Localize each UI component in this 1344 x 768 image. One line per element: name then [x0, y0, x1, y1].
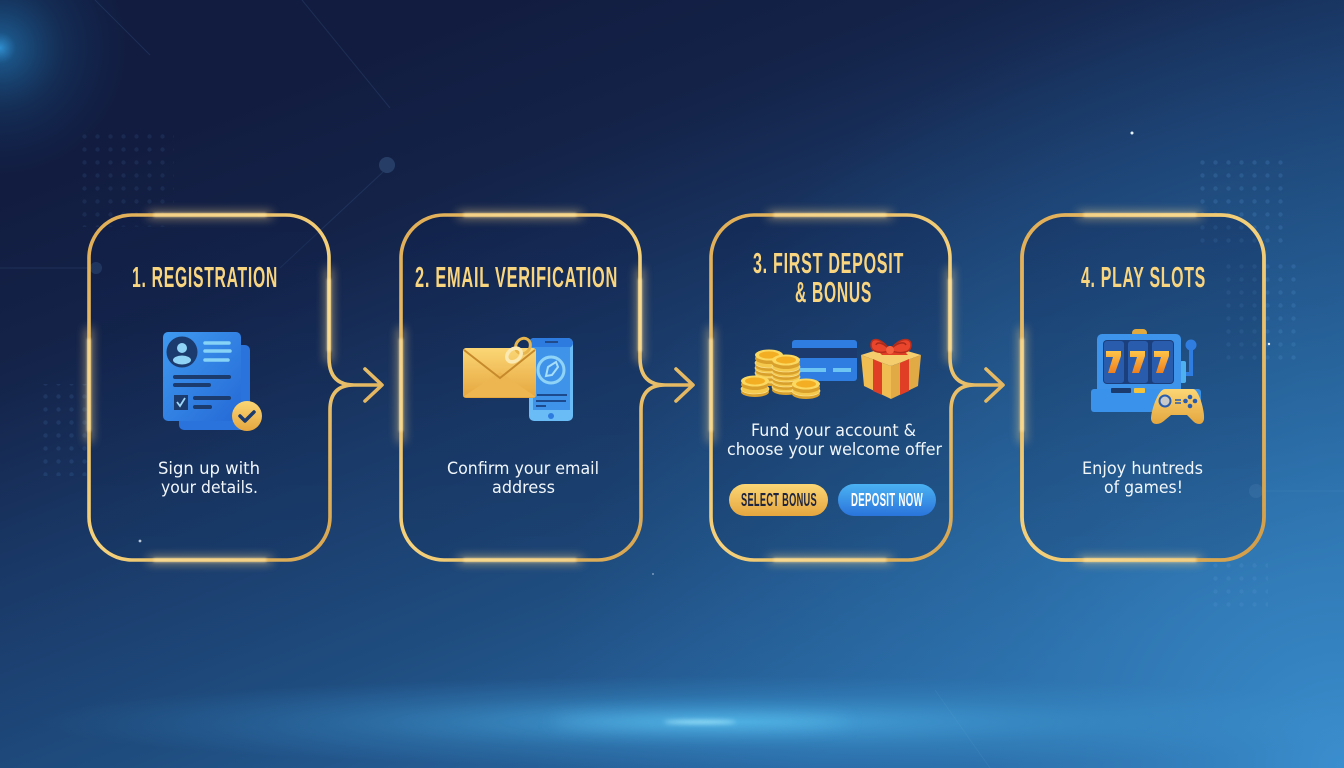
description: Confirm your email — [447, 459, 599, 478]
description — [727, 421, 942, 459]
description: of games! — [1104, 478, 1183, 497]
panel: step 2 email verification — [401, 215, 693, 560]
button: select bonus: SELECT BONUS — [741, 490, 817, 510]
button: deposit now — [838, 484, 936, 516]
icon: slot machine and gamepad — [1091, 329, 1204, 424]
heading: 2. EMAIL VERIFICATION — [415, 262, 618, 294]
description: address — [492, 478, 555, 497]
description — [158, 459, 260, 497]
heading — [753, 248, 904, 309]
description — [447, 459, 599, 497]
icon: coin stacks — [741, 350, 820, 399]
panel: step 1 registration — [89, 215, 382, 560]
heading: & BONUS — [795, 277, 872, 309]
heading: 1. REGISTRATION — [132, 262, 278, 294]
icon: envelope and phone — [463, 335, 573, 421]
button: select bonus — [729, 484, 828, 516]
description: Sign up with — [158, 459, 260, 478]
description: choose your welcome offer — [727, 440, 942, 459]
icon: gift box — [861, 340, 921, 399]
icon: registration form — [163, 332, 262, 431]
background sparkles — [139, 132, 1270, 575]
card outline with arrow — [711, 215, 1003, 560]
description: Enjoy huntreds — [1082, 459, 1203, 478]
heading: 3. FIRST DEPOSIT — [753, 248, 904, 280]
panel: step 4 play slots — [1022, 215, 1264, 560]
background dot patterns — [39, 127, 1304, 610]
button: deposit now: DEPOSIT NOW — [851, 490, 923, 510]
card outline — [1022, 215, 1264, 560]
card outline with arrow — [89, 215, 382, 560]
description: your details. — [161, 478, 258, 497]
icon: credit card — [792, 340, 857, 381]
panel: step 3 first deposit and bonus — [711, 215, 1003, 560]
description: Fund your account & — [751, 421, 916, 440]
description — [1082, 459, 1203, 497]
card outline with arrow — [401, 215, 693, 560]
heading: 4. PLAY SLOTS — [1081, 262, 1206, 294]
